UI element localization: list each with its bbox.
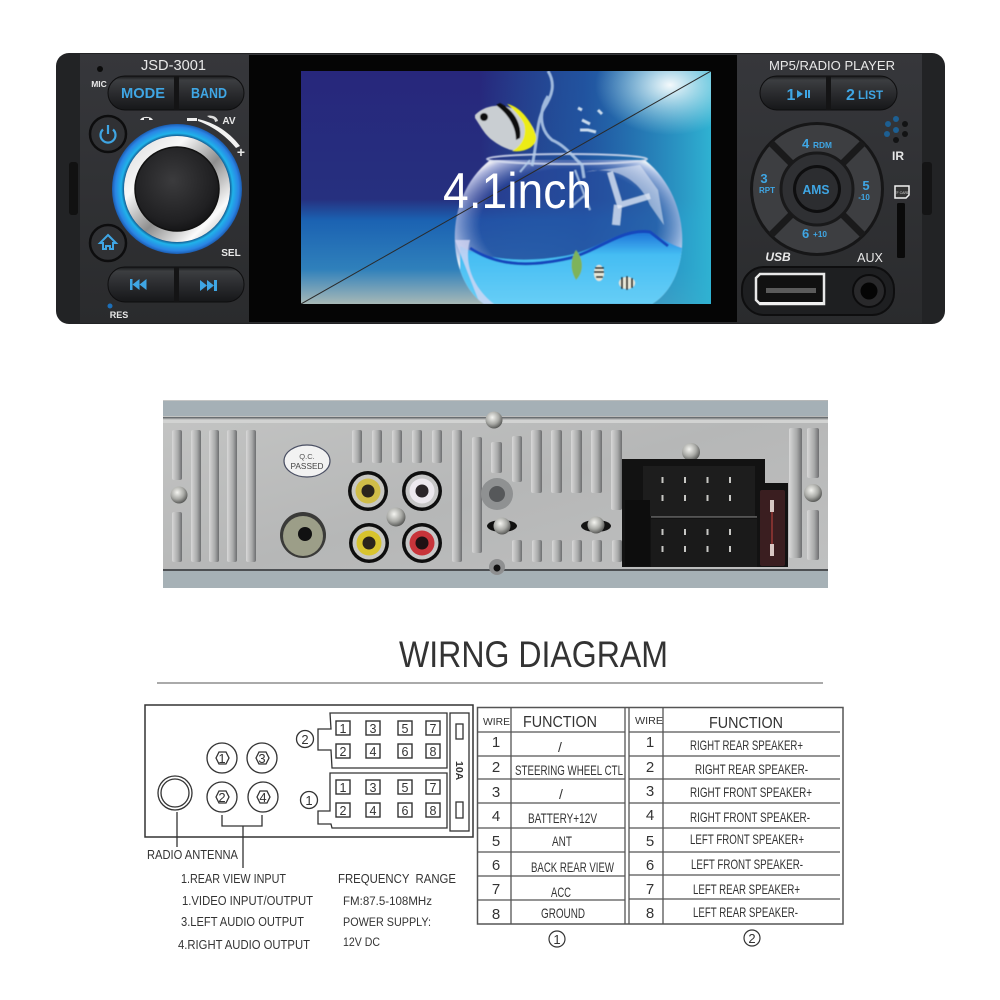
RCA socket symbols [207, 743, 278, 812]
left functions: BACK REAR VIEW [531, 859, 615, 875]
control pad: RDM [813, 140, 832, 150]
right functions: RIGHT REAR SPEAKER+ [690, 737, 803, 753]
right functions: RIGHT FRONT SPEAKER+ [690, 784, 812, 800]
pin numbers: 5 [402, 722, 409, 736]
pin numbers: 2 [340, 745, 347, 759]
right functions [690, 737, 812, 920]
water splash [520, 71, 602, 210]
control pad: RPT [759, 186, 775, 195]
left wire numbers: 3 [492, 784, 500, 801]
button 1 and 2: 2 [846, 87, 855, 104]
previous and next button [108, 267, 244, 302]
left wire numbers: 1 [492, 734, 500, 751]
control pad: -10 [858, 193, 870, 202]
mode and band button: BAND [191, 85, 227, 102]
AUX label: AUX [857, 251, 884, 265]
right functions: RIGHT REAR SPEAKER- [695, 761, 808, 777]
RCA socket symbols: 3 [258, 751, 266, 766]
left functions: / [559, 786, 563, 802]
control pad: AMS [802, 183, 830, 197]
small fish [572, 250, 635, 290]
large tropical fish [475, 103, 536, 151]
reset: RES [110, 310, 128, 320]
USB and AUX ports [742, 267, 894, 315]
left functions [515, 739, 623, 921]
left table headers: WIRE [483, 717, 510, 728]
chassis ribs [172, 428, 819, 562]
outer frame [145, 705, 473, 837]
pin numbers: 5 [402, 781, 409, 795]
left wire numbers: 7 [492, 881, 500, 898]
left functions: BATTERY+12V [528, 810, 597, 826]
right table headers: FUNCTION [709, 715, 783, 732]
fuse block [450, 713, 469, 831]
table grid [477, 707, 843, 924]
title: WIRNG DIAGRAM [399, 634, 668, 675]
schematic notes: 12V DC [343, 937, 380, 949]
antenna symbol [158, 776, 192, 847]
QC passed sticker: PASSED [290, 462, 324, 471]
pin numbers: 1 [340, 781, 347, 795]
rear panel [163, 400, 828, 588]
connector number 2 [296, 730, 314, 748]
body and end caps [56, 53, 945, 324]
screen size label: 4.1inch [443, 163, 592, 219]
pin numbers: 1 [340, 722, 347, 736]
right table headers: WIRE [635, 716, 663, 727]
connector outline 1 [318, 773, 447, 828]
right wire numbers: 3 [646, 783, 654, 800]
control pad: 6 [802, 226, 809, 241]
left wire numbers: 8 [492, 906, 500, 923]
car stereo front panel [56, 35, 945, 324]
wiring schematic [145, 705, 473, 868]
schematic notes: POWER SUPPLY: [343, 917, 431, 929]
pin numbers: 7 [430, 781, 437, 795]
schematic notes [147, 848, 456, 952]
connector number 1 [300, 792, 318, 808]
pin numbers: 3 [370, 781, 377, 795]
left table headers [483, 714, 597, 731]
right functions: RIGHT FRONT SPEAKER- [690, 809, 810, 825]
table number 2: 2 [748, 931, 756, 946]
right wire numbers: 2 [646, 759, 654, 776]
schematic notes: 1.VIDEO INPUT/OUTPUT [182, 894, 313, 908]
screen diagonal line [301, 71, 711, 304]
right wire numbers: 1 [646, 734, 654, 751]
pin numbers: 3 [370, 722, 377, 736]
table number 2 [744, 930, 760, 946]
metal chassis [163, 400, 828, 588]
screws [170, 412, 822, 534]
RCA socket symbols: 2 [218, 790, 226, 805]
left functions: STEERING WHEEL CTL [515, 762, 623, 778]
control pad: 5 [862, 178, 870, 193]
mode and band button: MODE [121, 85, 165, 102]
right functions: LEFT FRONT SPEAKER+ [690, 831, 804, 847]
left wire numbers: 2 [492, 759, 500, 776]
connector number 1: 1 [305, 793, 313, 808]
right wire numbers: 8 [646, 905, 654, 922]
left functions: ANT [552, 833, 572, 849]
right wire numbers [646, 734, 654, 922]
pin numbers: 2 [340, 804, 347, 818]
TF card slot: TF CARD [894, 191, 910, 195]
left wire numbers: 5 [492, 833, 500, 850]
pin numbers: 8 [430, 745, 437, 759]
schematic notes: FM:87.5-108MHz [343, 896, 432, 908]
connector outline 2 [318, 713, 447, 768]
player label: MP5/RADIO PLAYER [769, 59, 895, 73]
left wire numbers [492, 734, 500, 923]
reset [108, 304, 128, 320]
button 1 and 2: 1 [787, 87, 796, 104]
right wire numbers: 6 [646, 857, 654, 874]
mode and band button [108, 76, 244, 110]
right functions: LEFT FRONT SPEAKER- [691, 856, 803, 872]
fish bowl [455, 154, 690, 310]
left wire numbers: 6 [492, 857, 500, 874]
model label: JSD-3001 [141, 58, 206, 74]
select label: SEL [221, 248, 241, 259]
schematic notes: 4.RIGHT AUDIO OUTPUT [178, 938, 310, 952]
antenna socket [280, 512, 326, 558]
right wire numbers: 4 [646, 807, 654, 824]
speaker dots [884, 116, 908, 143]
control pad [750, 122, 884, 256]
infrared mark: IR [892, 149, 904, 163]
connector number 2: 2 [301, 732, 309, 747]
right table headers [635, 715, 783, 732]
pin numbers: 4 [370, 804, 377, 818]
microphone: MIC [91, 79, 107, 89]
pin numbers: 7 [430, 722, 437, 736]
fuse [760, 490, 785, 566]
right wire numbers: 7 [646, 881, 654, 898]
pin numbers: 6 [402, 745, 409, 759]
volume marks: + [237, 144, 245, 160]
left functions: / [558, 739, 562, 755]
USB label: USB [765, 250, 791, 264]
home button [90, 225, 126, 261]
RCA socket symbols: 4 [259, 790, 267, 805]
right functions: LEFT REAR SPEAKER+ [693, 881, 800, 897]
volume marks: AV [222, 116, 236, 127]
wiring connector [622, 459, 788, 567]
volume marks [140, 116, 245, 160]
screen bezel [249, 55, 737, 322]
pin numbers: 4 [370, 745, 377, 759]
left wire numbers: 4 [492, 808, 500, 825]
schematic notes: 1.REAR VIEW INPUT [181, 872, 286, 886]
control pad: +10 [813, 229, 827, 239]
button 1 and 2 [760, 76, 897, 110]
schematic notes: 3.LEFT AUDIO OUTPUT [181, 915, 304, 929]
RCA sockets [348, 471, 442, 563]
microphone [91, 66, 107, 89]
right functions: LEFT REAR SPEAKER- [693, 904, 798, 920]
fuse block: 10A [453, 761, 465, 781]
pin numbers [340, 722, 437, 818]
volume knob [112, 124, 242, 254]
QC passed sticker: Q.C. [299, 452, 315, 461]
control pad: 4 [802, 136, 810, 151]
button 1 and 2: LIST [858, 88, 884, 102]
mounting holes [481, 478, 611, 575]
table number 1 [549, 931, 565, 947]
left table headers: FUNCTION [523, 714, 597, 731]
connector pins [336, 721, 440, 817]
control pad: 3 [760, 171, 768, 186]
schematic notes: FREQUENCY RANGE [338, 872, 456, 886]
RCA bracket line [222, 815, 262, 868]
pin numbers: 6 [402, 804, 409, 818]
table number 1: 1 [553, 932, 561, 947]
right wire numbers: 5 [646, 833, 654, 850]
QC passed sticker [284, 445, 330, 477]
left functions: ACC [551, 884, 571, 900]
RCA socket symbols: 1 [218, 751, 226, 766]
screen image [301, 71, 711, 304]
pin numbers: 8 [430, 804, 437, 818]
schematic notes: RADIO ANTENNA [147, 848, 239, 862]
wire function table [477, 707, 843, 947]
TF card slot [894, 186, 910, 258]
left functions: GROUND [541, 905, 585, 921]
power button [90, 116, 126, 152]
